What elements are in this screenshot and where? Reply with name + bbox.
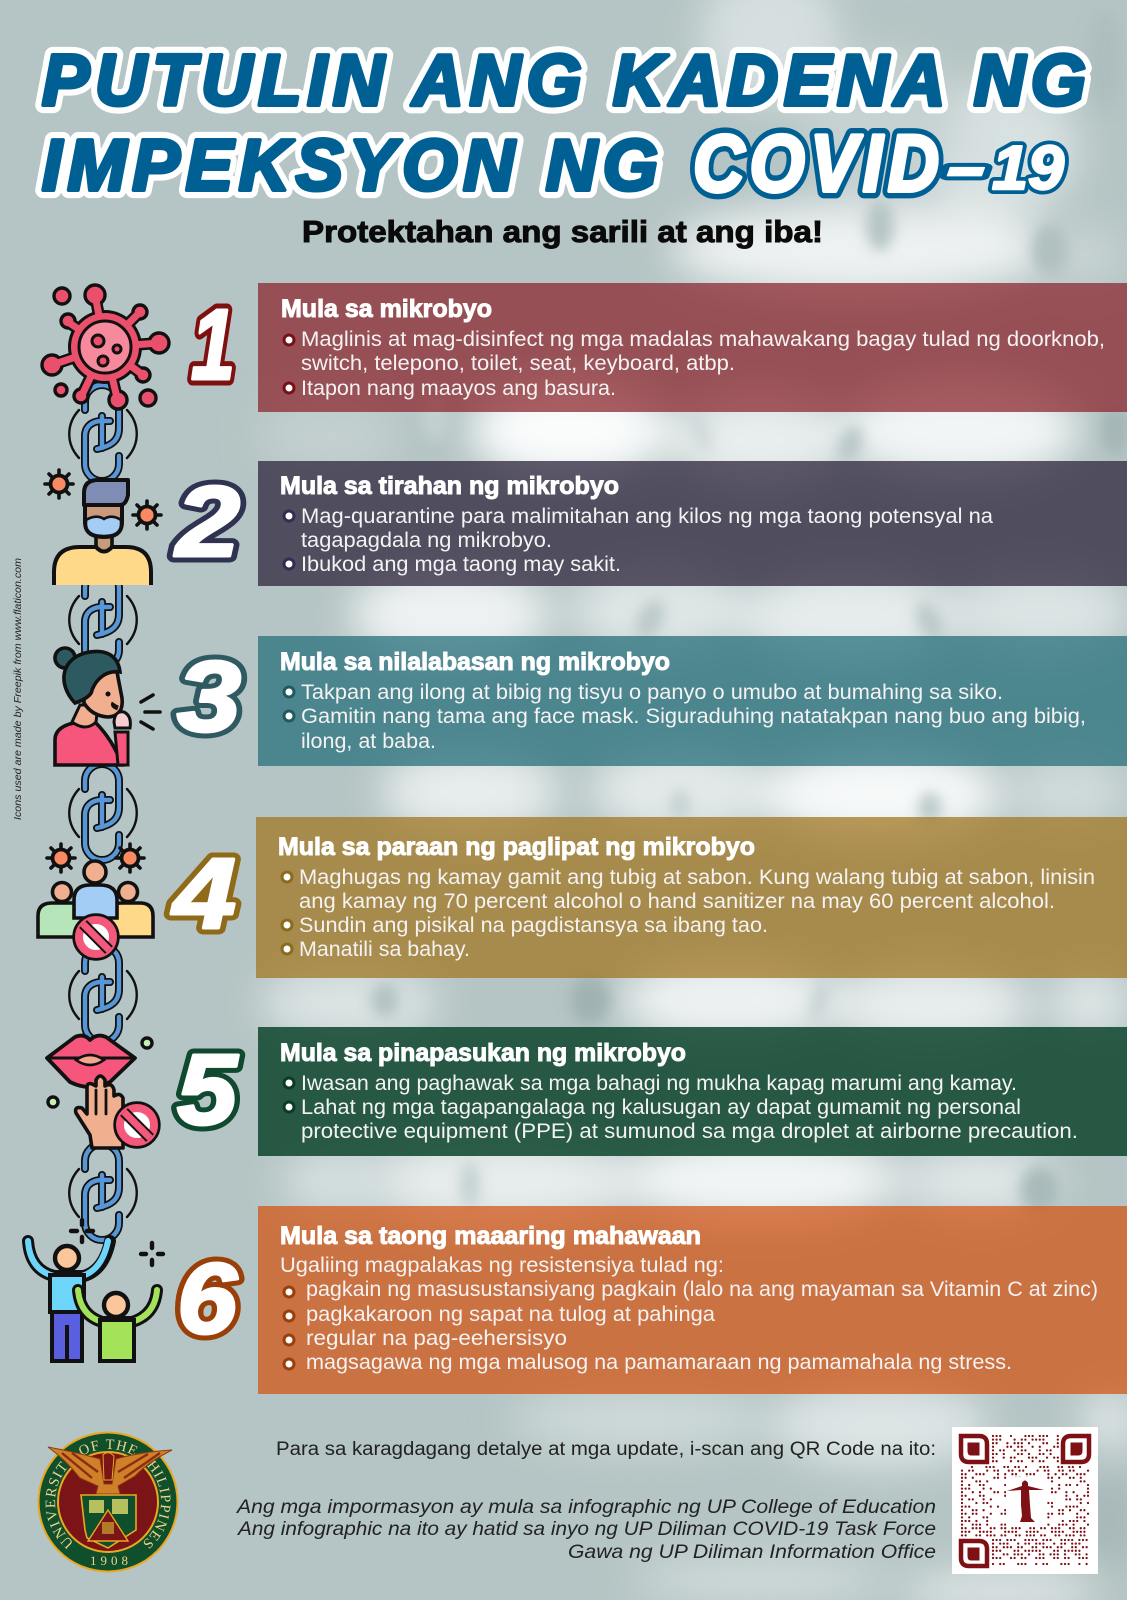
body text 1: switch, telepono, toilet, seat, keyboard, atbp. <box>301 352 735 375</box>
panel 4: mula sa paraan ng paglipat ng mikrobyo <box>256 817 1127 978</box>
body text 1: Maglinis at mag-disinfect ng mga madalas mahawakang bagay tulad ng doorknob, <box>301 328 1105 351</box>
body text 6 <box>280 1254 1098 1374</box>
body text 3: Takpan ang ilong at bibig ng tisyu o panyo o umubo at bumahing sa siko. <box>301 681 1003 704</box>
title line 1: PUTULIN ANG KADENA NG <box>42 40 1086 121</box>
body text 1: Itapon nang maayos ang basura. <box>301 377 616 400</box>
body text 6: magsagawa ng mga malusog na pamamaraan ng pamamahala ng stress. <box>306 1351 1012 1374</box>
body text 2: Ibukod ang mga taong may sakit. <box>301 553 621 576</box>
QR figure: oblation <box>1007 1480 1044 1522</box>
title line 2: IMPEKSYON NG <box>42 125 658 206</box>
title line 1: PUTULIN ANG KADENA NG <box>42 40 1086 121</box>
footer credits: Ang mga impormasyon ay mula sa infographic ng UP College of Education <box>236 1497 936 1518</box>
numeral 3: 3 <box>177 641 241 753</box>
body text 4: Sundin ang pisikal na pagdistansya sa ibang tao. <box>299 914 768 937</box>
QR modules <box>962 1436 1090 1564</box>
icon: virus <box>42 285 169 409</box>
QR eye: bottom left <box>961 1541 987 1566</box>
footer note: Para sa karagdagang detalye at mga update, i-scan ang QR Code na ito: <box>276 1439 936 1460</box>
body text 4: Maghugas ng kamay gamit ang tubig at sabon. Kung walang tubig at sabon, linisin <box>299 866 1095 889</box>
heading 6: Mula sa taong maaaring mahawaan <box>280 1222 701 1250</box>
seal shield <box>81 1495 136 1548</box>
body text 3 <box>284 681 1086 753</box>
footer credits: Gawa ng UP Diliman Information Office <box>568 1542 936 1563</box>
footer credits <box>236 1497 936 1563</box>
title: COVID-19 outlined <box>693 119 1065 209</box>
numeral 6: 6 <box>177 1243 238 1355</box>
panel 5: mula sa pinapasukan ng mikrobyo <box>258 1027 1127 1156</box>
heading 2: Mula sa tirahan ng mikrobyo <box>280 472 619 500</box>
numeral 2: 2 <box>174 466 240 578</box>
QR code <box>952 1427 1098 1574</box>
title: COVID-19 outlined: COVID <box>693 119 939 209</box>
numeral 5: 5 <box>177 1034 238 1146</box>
numeral 4: 4 <box>171 838 236 950</box>
title: COVID-19 outlined: 19 <box>992 134 1065 203</box>
icon: lips and hand <box>47 1036 159 1148</box>
QR eye: top right <box>1063 1436 1089 1462</box>
body text 6: regular na pag-eehersisyo <box>306 1327 567 1350</box>
body text 3: ilong, at baba. <box>301 730 436 753</box>
numeral 1: 1 <box>191 289 235 401</box>
chain links column <box>69 385 137 1240</box>
title line 2: IMPEKSYON NG <box>42 125 658 206</box>
footer credits: Ang infographic na ito ay hatid sa inyo ng UP Diliman COVID-19 Task Force <box>237 1519 936 1540</box>
body text 4: ang kamay ng 70 percent alcohol o hand sanitizer na may 60 percent alcohol. <box>299 890 1055 913</box>
icon: person with mask and germs <box>45 470 161 585</box>
logo: University of the Philippines seal <box>38 1432 178 1572</box>
body text 1 <box>284 328 1105 400</box>
body text 2: tagapagdala ng mikrobyo. <box>301 529 552 552</box>
body text 4 <box>282 866 1095 961</box>
body text 5: protective equipment (PPE) at sumunod sa mga droplet at airborne precaution. <box>301 1120 1078 1143</box>
seal lettering: UNIVERSITY OF THE PHILIPPINES <box>46 1439 170 1550</box>
title <box>42 40 1086 209</box>
title: COVID-19 outlined: COVID <box>693 119 939 209</box>
panel 3: mula sa nilalabasan ng mikrobyo <box>258 636 1127 766</box>
title: COVID-19 outlined: - <box>944 127 988 206</box>
numeral 1: 1 <box>191 289 235 401</box>
title: COVID-19 outlined: - <box>944 127 988 206</box>
seal lettering: 1908 <box>90 1553 128 1568</box>
numeral 6: 6 <box>177 1243 238 1355</box>
body text 4: Manatili sa bahay. <box>299 938 470 961</box>
panel 1: mula sa mikrobyo <box>258 283 1127 412</box>
body text 3: Gamitin nang tama ang face mask. Siguraduhing natatakpan nang buo ang bibig, <box>301 705 1086 728</box>
heading 4: Mula sa paraan ng paglipat ng mikrobyo <box>278 833 755 861</box>
panel 2: mula sa tirahan ng mikrobyo <box>258 461 1127 586</box>
body text 6: Ugaliing magpalakas ng resistensiya tulad ng: <box>280 1254 724 1277</box>
numeral 2: 2 <box>174 466 240 578</box>
heading 5: Mula sa pinapasukan ng mikrobyo <box>280 1039 686 1067</box>
body text 5 <box>284 1072 1078 1143</box>
heading 1: Mula sa mikrobyo <box>281 295 492 323</box>
QR eye: top left <box>961 1436 987 1462</box>
body text 5: Iwasan ang paghawak sa mga bahagi ng mukha kapag marumi ang kamay. <box>301 1072 1017 1095</box>
body text 6: pagkakaroon ng sapat na tulog at pahinga <box>306 1303 715 1326</box>
numeral 5: 5 <box>177 1034 238 1146</box>
icon: woman covering a sneeze <box>55 648 160 765</box>
body text 5: Lahat ng mga tagapangalaga ng kalusugan ay dapat gumamit ng personal <box>301 1096 1021 1119</box>
body text 2: Mag-quarantine para malimitahan ang kilos ng mga taong potensyal na <box>301 505 993 528</box>
subtitle: Protektahan ang sarili at ang iba! <box>302 214 823 249</box>
body text 6: pagkain ng masusustansiyang pagkain (lalo na ang mayaman sa Vitamin C at zinc) <box>306 1278 1098 1301</box>
icon: two people with raised arms <box>28 1220 163 1361</box>
credit: icons attribution: Icons used are made by Freepik from www.flaticon.com <box>12 558 24 820</box>
numeral 4: 4 <box>171 838 236 950</box>
title: COVID-19 outlined: 19 <box>992 134 1065 203</box>
seal eagle <box>48 1447 172 1494</box>
body text 2 <box>284 505 993 576</box>
heading 3: Mula sa nilalabasan ng mikrobyo <box>280 648 670 676</box>
panel 6: mula sa taong maaaring mahawaan <box>258 1206 1127 1394</box>
numeral 3: 3 <box>177 641 241 753</box>
icon: group of people with no sign <box>38 844 153 959</box>
